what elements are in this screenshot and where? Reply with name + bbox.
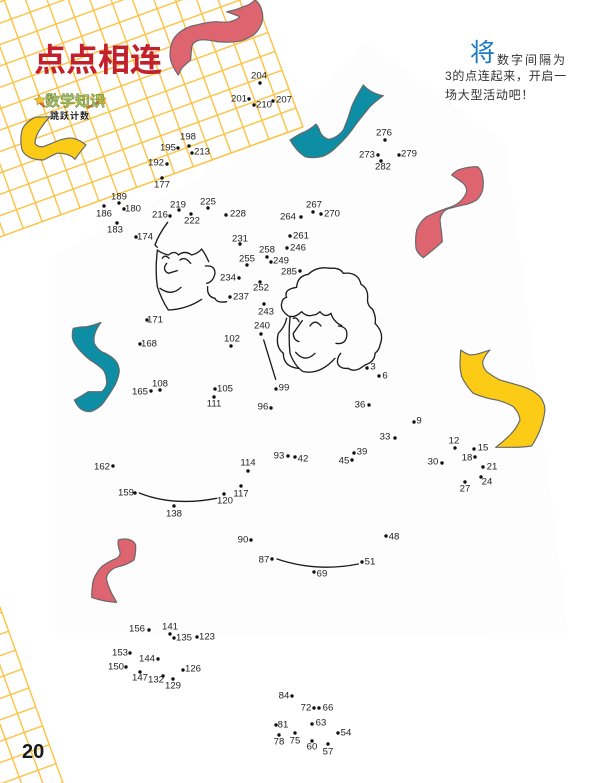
dots <box>102 81 485 746</box>
dot numbers: 3 <box>370 362 376 372</box>
dot numbers: 249 <box>273 256 289 266</box>
dot numbers: 159 <box>118 488 134 498</box>
ribbon: red top <box>170 0 263 75</box>
ribbon: red lower <box>92 539 136 602</box>
dot numbers: 237 <box>233 292 249 302</box>
dot numbers: 12 <box>449 436 459 446</box>
dot numbers: 222 <box>184 216 200 226</box>
dot numbers: 36 <box>355 400 365 410</box>
dot numbers: 69 <box>317 568 327 580</box>
dot numbers: 123 <box>199 632 215 642</box>
dot numbers: 75 <box>290 736 300 746</box>
grid paper: top left <box>0 0 303 237</box>
drawing: man's face <box>155 222 227 310</box>
dot numbers <box>94 70 497 758</box>
grid paper: bottom left <box>0 607 63 783</box>
ribbon: yellow right <box>460 350 545 447</box>
dot numbers: 18 <box>462 452 472 464</box>
dot numbers: 216 <box>152 210 168 220</box>
dot numbers: 213 <box>194 146 210 158</box>
dot numbers: 261 <box>293 230 309 242</box>
instruction text: 场大型活动吧！ <box>445 88 534 102</box>
dot numbers: 141 <box>162 622 178 632</box>
dot numbers: 108 <box>152 378 168 390</box>
dot numbers: 129 <box>165 680 181 692</box>
dot numbers: 135 <box>176 632 192 644</box>
dot numbers: 15 <box>478 442 488 454</box>
badge subheading: 跳跃计数 <box>50 111 90 121</box>
badge heading: 数学知识 <box>45 93 105 110</box>
dot numbers: 132 <box>148 674 164 686</box>
dot numbers: 243 <box>258 306 274 318</box>
dot numbers: 252 <box>253 282 269 294</box>
dot numbers: 33 <box>380 432 390 442</box>
dot numbers: 96 <box>258 402 268 412</box>
dot numbers: 219 <box>170 200 186 210</box>
dot numbers: 189 <box>111 192 127 202</box>
dot numbers: 93 <box>274 450 284 462</box>
dot numbers: 60 <box>307 742 317 752</box>
dot numbers: 201 <box>231 94 247 104</box>
dot numbers: 51 <box>365 556 375 568</box>
dot numbers: 87 <box>259 554 269 566</box>
dot numbers: 111 <box>207 398 221 410</box>
dot numbers: 57 <box>323 746 333 758</box>
dot numbers: 198 <box>180 132 196 142</box>
dot numbers: 177 <box>154 180 170 190</box>
dot numbers: 225 <box>200 196 216 208</box>
dot numbers: 207 <box>276 94 292 106</box>
dot numbers: 192 <box>148 158 164 168</box>
dot numbers: 63 <box>316 718 326 728</box>
dot numbers: 30 <box>428 456 438 468</box>
dot numbers: 99 <box>279 382 289 394</box>
dot numbers: 186 <box>96 208 112 220</box>
drawing: curve 159 to 120 <box>139 493 217 501</box>
ribbon: yellow small <box>21 117 86 160</box>
instruction initial character: 将 <box>470 39 495 67</box>
dot numbers: 84 <box>279 690 290 702</box>
dot numbers: 231 <box>232 234 248 244</box>
dot numbers: 285 <box>281 266 297 278</box>
drawing: woman's face <box>264 268 382 379</box>
dot numbers: 264 <box>280 212 297 222</box>
dot numbers: 150 <box>108 662 124 672</box>
dot numbers: 72 <box>301 702 311 714</box>
dot numbers: 204 <box>251 70 268 82</box>
dot numbers: 120 <box>217 496 233 506</box>
dot numbers: 117 <box>233 488 249 500</box>
dot numbers: 273 <box>359 150 375 160</box>
instruction text: 3的点连起来，开启一 <box>445 69 567 83</box>
dot numbers: 183 <box>107 224 123 236</box>
dot numbers: 282 <box>375 162 391 172</box>
dot numbers: 153 <box>112 648 128 658</box>
dot numbers: 267 <box>306 200 322 210</box>
dot numbers: 126 <box>185 664 201 674</box>
dot numbers: 156 <box>129 624 145 634</box>
dot numbers: 240 <box>254 320 270 332</box>
dot numbers: 210 <box>256 100 272 110</box>
dot numbers: 147 <box>132 672 148 684</box>
dot numbers: 105 <box>217 384 233 394</box>
dot numbers: 42 <box>298 454 308 464</box>
dot numbers: 171 <box>147 314 163 326</box>
dot numbers: 246 <box>290 242 306 254</box>
dot numbers: 27 <box>460 484 470 494</box>
dot numbers: 162 <box>94 462 110 472</box>
ribbon: teal left <box>72 322 119 412</box>
dot numbers: 48 <box>389 532 399 542</box>
dot numbers: 165 <box>132 386 148 398</box>
dot numbers: 54 <box>341 728 352 738</box>
dot numbers: 39 <box>357 446 367 458</box>
dot numbers: 279 <box>401 148 417 160</box>
ribbon: teal top <box>290 85 383 158</box>
dot numbers: 258 <box>259 244 275 256</box>
dot numbers: 195 <box>160 142 176 154</box>
drawing: curve 87 to 51 <box>277 559 358 567</box>
icon: badge stars <box>34 95 106 108</box>
dot numbers: 144 <box>139 654 156 664</box>
dot numbers: 270 <box>324 208 340 220</box>
dot numbers: 114 <box>240 458 256 468</box>
dot numbers: 228 <box>230 208 246 220</box>
dot numbers: 21 <box>487 462 497 472</box>
dot numbers: 180 <box>125 204 141 214</box>
dot numbers: 81 <box>278 720 288 730</box>
dot numbers: 138 <box>166 508 182 520</box>
dot numbers: 78 <box>274 736 284 748</box>
instruction text: 数字间隔为 <box>497 53 567 67</box>
dot numbers: 168 <box>141 338 157 350</box>
dot numbers: 276 <box>376 128 392 138</box>
dot numbers: 234 <box>220 272 237 284</box>
ribbon: red right <box>416 167 483 258</box>
dot numbers: 255 <box>239 254 255 264</box>
dot numbers: 66 <box>323 702 333 714</box>
dot numbers: 6 <box>382 370 388 382</box>
dot numbers: 90 <box>238 534 248 546</box>
page number: 20 <box>22 741 44 763</box>
title: 点点相连 <box>34 42 162 78</box>
dot numbers: 45 <box>339 456 349 466</box>
dot numbers: 102 <box>224 334 240 344</box>
dot numbers: 9 <box>416 416 422 426</box>
dot numbers: 174 <box>137 232 154 242</box>
dot numbers: 24 <box>482 476 493 488</box>
instruction text <box>445 39 567 102</box>
